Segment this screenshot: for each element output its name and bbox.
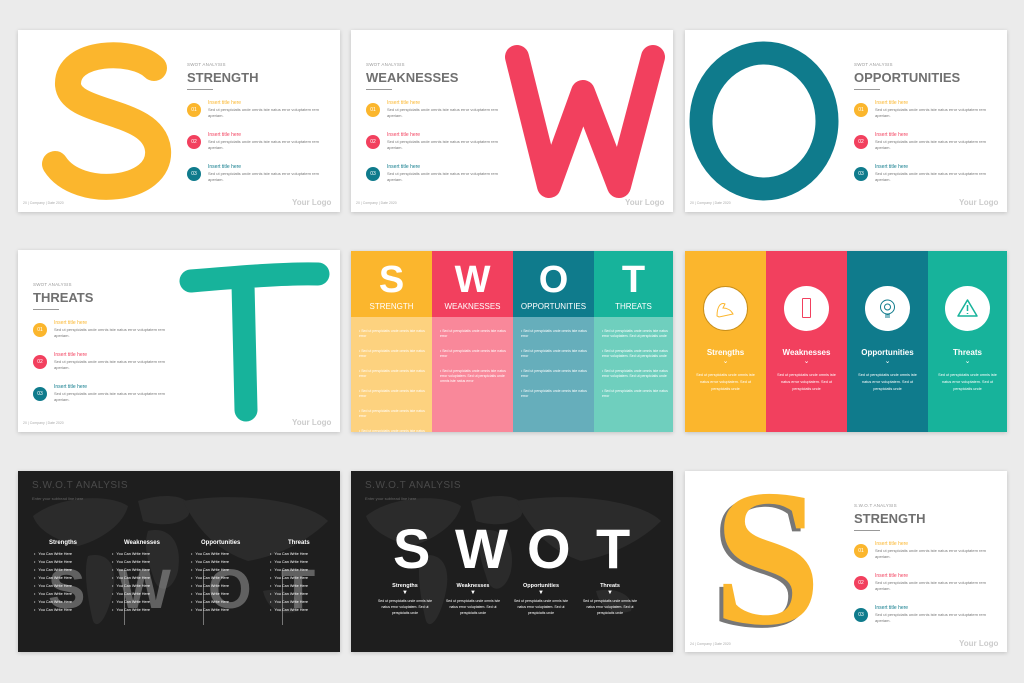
slide: opportunities O [685,30,1007,212]
column S: S [379,259,404,301]
letter W [505,45,665,198]
lists: • You Can Write Here [191,584,229,588]
slide: threats T: 20 | Company | Date 2020 [23,421,64,425]
slide: weaknesses W: 20 | Company | Date 2020 [356,201,397,205]
text block: SWOT ANALYSIS [33,282,72,287]
text block: Sed ut perspiciatis unde omnis iste natus error voluptatem rem aperiam. [875,171,986,182]
text block: Insert title here [54,384,87,390]
column T [594,251,673,433]
text block: Insert title here [875,541,908,547]
column threats: Threats [953,348,982,357]
big faded letters: W [118,557,171,620]
lists: • You Can Write Here [191,560,229,564]
text block [854,62,986,182]
lists: • You Can Write Here [34,560,72,564]
column strengths: ⌄ [723,358,728,365]
lists: • You Can Write Here [270,576,308,580]
text block: Insert title here [54,352,87,358]
text block: 01 [191,107,197,113]
text block: Sed ut perspiciatis unde omnis iste natus error voluptatem rem aperiam. [54,327,165,338]
column O: • Sed ut perspiciatis unde omnis iste natus error [521,329,587,338]
slide: dark map with lists [18,471,340,652]
title: S.W.O.T ANALYSIS [365,480,461,491]
text block: 03 [370,171,376,177]
column O: • Sed ut perspiciatis unde omnis iste natus error [521,389,587,398]
big faded letters [48,557,315,620]
lists: • You Can Write Here [191,576,229,580]
column T: T [622,259,645,301]
text block: STRENGTH [854,511,926,526]
lists: • You Can Write Here [270,584,308,588]
column threats: ⌄ [965,358,970,365]
lists: • You Can Write Here [34,584,72,588]
column opportunities: Opportunities [861,348,914,357]
column weaknesses: Weaknesses [783,348,830,357]
text block: Sed ut perspiciatis unde omnis iste natus error voluptatem rem aperiam. [208,139,319,150]
text block: SWOT ANALYSIS [187,62,226,67]
big SWOT letters: O [527,517,571,580]
text block: Sed ut perspiciatis unde omnis iste natus error voluptatem rem aperiam. [387,107,498,118]
column opportunities: Sed ut perspiciatis unde omnis iste natus error voluptatem. Sed ut perspiciatis unde [858,373,917,391]
lists: • You Can Write Here [112,552,150,556]
text block: Insert title here [875,605,908,611]
column strengths [685,251,766,433]
lists: Threats [288,540,310,546]
lists: • You Can Write Here [34,600,72,604]
columns: ▼ [470,590,476,596]
text block: Insert title here [208,100,241,106]
column S: • Sed ut perspiciatis unde omnis iste natus error [359,329,425,338]
text block: Sed ut perspiciatis unde omnis iste natus error voluptatem rem aperiam. [875,612,986,622]
columns: Sed ut perspiciatis unde omnis iste natus error voluptatem. Sed ut perspiciatis unde [446,599,500,615]
lists: • You Can Write Here [112,568,150,572]
column T: • Sed ut perspiciatis unde omnis iste natus error voluptatem. Sed ut perspiciatis unde [602,349,668,358]
column S: • Sed ut perspiciatis unde omnis iste natus error [359,349,425,358]
slide: weaknesses W [351,30,673,212]
column O: • Sed ut perspiciatis unde omnis iste natus error [521,349,587,358]
text block: 02 [191,139,197,145]
text block: Sed ut perspiciatis unde omnis iste natus error voluptatem rem aperiam. [875,580,986,590]
lists: • You Can Write Here [191,552,229,556]
slide: strength S [18,30,340,212]
text block: 02 [858,580,864,586]
column weaknesses: ⌄ [804,358,809,365]
text block: 03 [858,171,864,177]
text block: Insert title here [54,320,87,326]
text block: STRENGTH [187,70,258,85]
columns: Weaknesses [457,583,489,589]
title: S.W.O.T ANALYSIS [32,480,128,491]
slide: weaknesses W: Your Logo [625,198,664,207]
big faded letters: O [208,557,252,620]
slide: serif S strength [685,471,1007,652]
column O: O [539,259,568,301]
columns: Opportunities [523,583,559,589]
text block: Insert title here [875,164,908,170]
letter S [42,42,172,200]
text block: WEAKNESSES [366,70,458,85]
column S [351,251,432,433]
column S: • Sed ut perspiciatis unde omnis iste natus error [359,409,425,418]
text block: 01 [370,107,376,113]
lists: • You Can Write Here [191,608,229,612]
column opportunities: ⌄ [885,358,890,365]
column S: • Sed ut perspiciatis unde omnis iste natus error [359,389,425,398]
lists: Opportunities [201,540,240,546]
lists: • You Can Write Here [270,560,308,564]
slide: strength S: Your Logo [292,198,331,207]
text block: 02 [370,139,376,145]
text block [187,62,319,182]
column T: • Sed ut perspiciatis unde omnis iste natus error [602,389,668,398]
column O [513,251,594,433]
columns: Sed ut perspiciatis unde omnis iste natus error voluptatem. Sed ut perspiciatis unde [378,599,432,615]
column weaknesses: Sed ut perspiciatis unde omnis iste natus error voluptatem. Sed ut perspiciatis unde [777,373,836,391]
slide: strength S: 20 | Company | Date 2020 [23,201,64,205]
columns: ▼ [607,590,613,596]
text block: Insert title here [387,100,420,106]
world map [33,496,328,624]
lists: Weaknesses [124,540,160,546]
text block: Sed ut perspiciatis unde omnis iste natus error voluptatem rem aperiam. [875,107,986,118]
column strengths: Sed ut perspiciatis unde omnis iste natus error voluptatem. Sed ut perspiciatis unde [696,373,755,391]
lists: • You Can Write Here [34,568,72,572]
lists [34,540,310,625]
text block: Insert title here [875,132,908,138]
lists: • You Can Write Here [34,592,72,596]
text block: SWOT ANALYSIS [854,62,893,67]
text block: Sed ut perspiciatis unde omnis iste natus error voluptatem rem aperiam. [208,171,319,182]
slide: serif S strength: Your Logo [959,639,998,648]
text block: Insert title here [387,164,420,170]
text block: 02 [37,359,43,365]
slide: SWOT columns with icons [685,251,1007,432]
lists: • You Can Write Here [191,568,229,572]
text block: Sed ut perspiciatis unde omnis iste natus error voluptatem rem aperiam. [875,139,986,150]
columns: Sed ut perspiciatis unde omnis iste natus error voluptatem. Sed ut perspiciatis unde [583,599,637,615]
slide: SWOT columns with bullets [351,251,673,432]
text block: Insert title here [208,164,241,170]
text block: Sed ut perspiciatis unde omnis iste natus error voluptatem rem aperiam. [54,391,165,402]
slide: dark map with big SWOT: Enter your subhead line here [365,496,416,501]
text block: Sed ut perspiciatis unde omnis iste natus error voluptatem rem aperiam. [387,139,498,150]
columns: ▼ [538,590,544,596]
text block: 01 [37,327,43,333]
big SWOT letters: W [455,517,508,580]
lists: • You Can Write Here [270,592,308,596]
slide: dark map with big SWOT [351,471,673,652]
column threats [928,251,1007,433]
text block: Sed ut perspiciatis unde omnis iste natus error voluptatem rem aperiam. [54,359,165,370]
column O: OPPORTUNITIES [521,302,586,311]
text block: SWOT ANALYSIS [366,62,405,67]
text block: Sed ut perspiciatis unde omnis iste natus error voluptatem rem aperiam. [387,171,498,182]
column W: WEAKNESSES [444,302,500,311]
column W: • Sed ut perspiciatis unde omnis iste natus error [440,349,506,358]
columns [378,583,637,615]
column S: • Sed ut perspiciatis unde omnis iste natus error [359,369,425,378]
big SWOT letters: T [596,517,630,580]
slide: serif S strength: 24 | Company | Date 2020 [690,642,731,646]
column W: W [455,259,490,301]
slide: opportunities O: 20 | Company | Date 2020 [690,201,731,205]
lists: • You Can Write Here [191,600,229,604]
column T: THREATS [615,302,652,311]
letter T [180,262,330,422]
column W: • Sed ut perspiciatis unde omnis iste natus error voluptatem. Sed ut perspiciatis unde omnis iste natus error [440,369,506,383]
text block: Insert title here [875,100,908,106]
text block: 01 [858,107,864,113]
big faded letters: T [281,557,315,620]
lists: • You Can Write Here [112,576,150,580]
text block: 01 [858,548,864,554]
lists: • You Can Write Here [112,584,150,588]
slide: threats T: Your Logo [292,418,331,427]
text block: 03 [37,391,43,397]
text block: 03 [858,612,864,618]
lists: • You Can Write Here [112,592,150,596]
text block: THREATS [33,290,93,305]
big SWOT letters: S [393,517,430,580]
text block: Insert title here [208,132,241,138]
column weaknesses [766,251,847,433]
lists: • You Can Write Here [112,608,150,612]
column O: • Sed ut perspiciatis unde omnis iste natus error [521,369,587,378]
lists: Strengths [49,540,77,546]
big faded letters: S [48,557,85,620]
text block: 03 [191,171,197,177]
lists: • You Can Write Here [191,592,229,596]
big SWOT letters [393,517,630,580]
lists: • You Can Write Here [270,568,308,572]
letter O [690,42,838,200]
column W: • Sed ut perspiciatis unde omnis iste natus error [440,329,506,338]
text block: OPPORTUNITIES [854,70,960,85]
text block [854,503,986,623]
column T: • Sed ut perspiciatis unde omnis iste natus error voluptatem. Sed ut perspiciatis unde [602,329,668,338]
lists: • You Can Write Here [112,600,150,604]
column W [432,251,513,433]
text block: Insert title here [387,132,420,138]
lists: • You Can Write Here [270,608,308,612]
column T: • Sed ut perspiciatis unde omnis iste natus error voluptatem. Sed ut perspiciatis unde [602,369,668,378]
text block: Sed ut perspiciatis unde omnis iste natus error voluptatem rem aperiam. [208,107,319,118]
column S: STRENGTH [370,302,414,311]
column opportunities [847,251,928,433]
text block: 02 [858,139,864,145]
column strengths: Strengths [707,348,744,357]
slide: threats T [18,250,340,432]
lists: • You Can Write Here [34,576,72,580]
slide: opportunities O: Your Logo [959,198,998,207]
text block [33,282,165,402]
slide: dark map with lists: Enter your subhead line here [32,496,83,501]
text block: S.W.O.T ANALYSIS [854,503,897,508]
columns: Strengths [392,583,418,589]
text block: Insert title here [875,573,908,579]
lists: • You Can Write Here [270,600,308,604]
lists: • You Can Write Here [270,552,308,556]
lists: • You Can Write Here [112,560,150,564]
columns: Sed ut perspiciatis unde omnis iste natus error voluptatem. Sed ut perspiciatis unde [514,599,568,615]
column threats: Sed ut perspiciatis unde omnis iste natus error voluptatem. Sed ut perspiciatis unde [938,373,997,391]
world map [366,496,660,624]
text block: Sed ut perspiciatis unde omnis iste natus error voluptatem rem aperiam. [875,548,986,558]
columns: Threats [600,583,620,589]
lists: • You Can Write Here [34,608,72,612]
columns: ▼ [402,590,408,596]
lists: • You Can Write Here [34,552,72,556]
text block [366,62,498,182]
